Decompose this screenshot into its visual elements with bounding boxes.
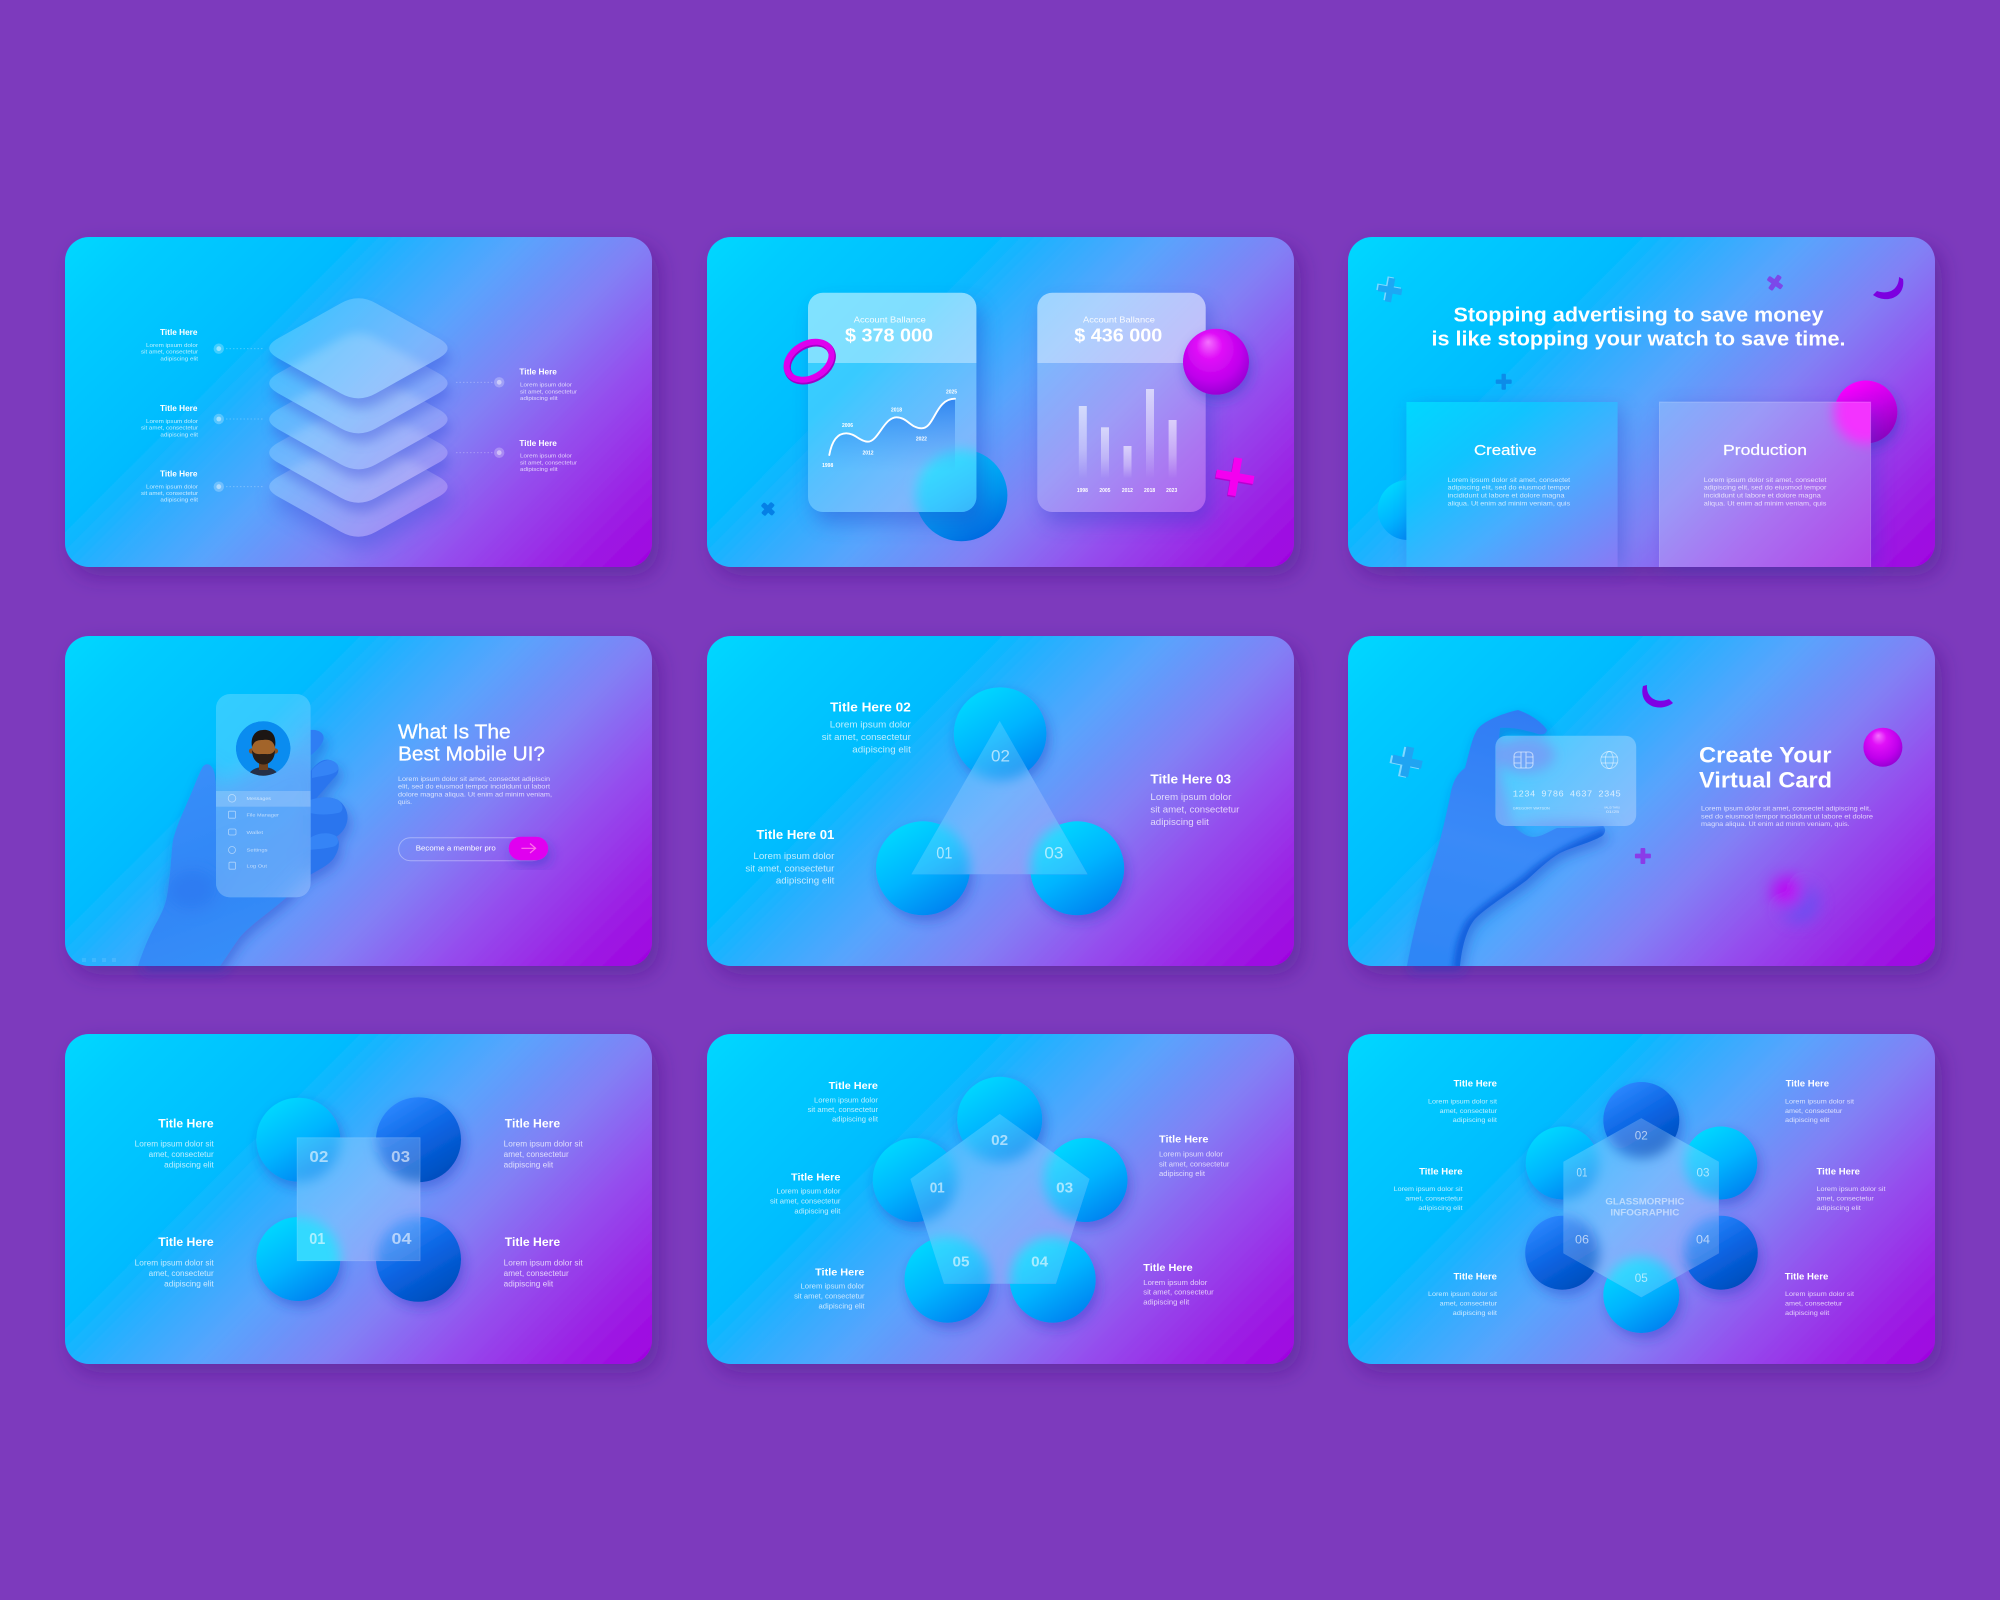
- text block: bottom left: Title Here: [1454, 1271, 1497, 1282]
- card header text: $ 436 000: [1074, 326, 1162, 346]
- spheres behind panels: [1378, 380, 1897, 540]
- left text block 1: [141, 327, 198, 362]
- bar chart: 2018: [1144, 488, 1155, 494]
- card globe: [1601, 752, 1618, 768]
- center label: [1605, 1196, 1685, 1218]
- heading: Stopping advertising to save money: [1454, 305, 1824, 327]
- text block: title 03: Title Here 03: [1150, 771, 1231, 786]
- text block: bottom left: [1428, 1271, 1498, 1317]
- numbers: 02: [1635, 1128, 1648, 1142]
- text block: bottom right: Lorem ipsum dolor: [1143, 1280, 1208, 1287]
- card header text: $ 378 000: [845, 326, 933, 346]
- left text block 3: [141, 468, 198, 504]
- text block: middle left: adipiscing elit: [794, 1208, 840, 1215]
- numbers: [309, 1149, 412, 1248]
- text block: top left: amet, consectetur: [149, 1150, 214, 1159]
- body text: Lorem ipsum dolor sit amet, consectet adipiscin: [398, 776, 551, 783]
- card number and details: 01/25: [1606, 810, 1619, 814]
- right text block 1: adipiscing elit: [520, 396, 558, 402]
- slide card background: [65, 636, 652, 966]
- panel: production: [1659, 402, 1872, 567]
- text block: title 03: sit amet, consectetur: [1150, 805, 1239, 815]
- text block: top left: adipiscing elit: [1453, 1117, 1497, 1124]
- body text: dolore magna aliqua. Ut enim ad minim veniam,: [398, 791, 552, 798]
- icon: cyan plus: [1387, 743, 1425, 780]
- text block: top right: sit amet, consectetur: [1159, 1161, 1230, 1168]
- illustration: blue hand: [1407, 710, 1606, 970]
- menu list: Messages: [246, 796, 272, 801]
- glass hexagon: [1563, 1118, 1719, 1298]
- text block: top left: Title Here: [1454, 1079, 1497, 1090]
- slide card background: [1348, 237, 1935, 567]
- right text block 2: adipiscing elit: [520, 467, 558, 473]
- line chart: 2025: [946, 389, 957, 395]
- card number and details: GREGORY WATSON: [1513, 806, 1550, 810]
- text block: bottom right: adipiscing elit: [1785, 1310, 1829, 1317]
- text block: top left: Title Here: [158, 1118, 214, 1130]
- text block: title 01: sit amet, consectetur: [745, 863, 834, 873]
- left text block 3: sit amet, consectetur: [141, 491, 198, 497]
- creative body text: [1448, 477, 1570, 507]
- bar chart: [1077, 389, 1177, 494]
- text block: middle left: [1394, 1167, 1463, 1212]
- production body text: [1704, 477, 1827, 507]
- bar chart: 2005: [1099, 488, 1111, 494]
- illustration: blue hand: [138, 730, 348, 966]
- numbers: [936, 746, 1063, 863]
- text block: bottom left: [135, 1237, 214, 1289]
- text block: top left: Lorem ipsum dolor sit: [135, 1139, 214, 1148]
- text block: middle left: sit amet, consectetur: [770, 1199, 841, 1206]
- card number and details: 1234 9786 4637 2345: [1513, 790, 1621, 800]
- spheres: [873, 1077, 1128, 1323]
- left text block 1: Title Here: [160, 327, 198, 337]
- body text: elit, sed do eiusmod tempor incididunt ut labort: [398, 784, 550, 791]
- text block: bottom right: [504, 1237, 583, 1289]
- text block: title 02: Lorem ipsum dolor: [830, 720, 911, 730]
- numbers: 06: [1575, 1233, 1589, 1247]
- text block: top right: Lorem ipsum dolor sit: [1785, 1098, 1854, 1105]
- menu list: Settings: [246, 848, 268, 853]
- spheres: [256, 1097, 461, 1302]
- icon: magenta plus: [1212, 455, 1257, 500]
- text block: top left: Title Here: [829, 1080, 878, 1092]
- left text block 1: Lorem ipsum dolor: [146, 343, 198, 349]
- text block: top right: Lorem ipsum dolor: [1159, 1152, 1224, 1159]
- text block: bottom left: sit amet, consectetur: [794, 1294, 865, 1301]
- bar chart: 1998: [1077, 488, 1088, 494]
- numbers: [1575, 1128, 1710, 1285]
- numbers: 05: [1635, 1271, 1648, 1285]
- line chart: 2018: [891, 407, 902, 413]
- slide card background: [707, 1034, 1294, 1364]
- text block: top right: adipiscing elit: [1785, 1117, 1829, 1124]
- text block: middle left: amet, consectetur: [1405, 1196, 1463, 1203]
- text block: middle right: Lorem ipsum dolor sit: [1816, 1186, 1886, 1193]
- heading: [1699, 743, 1832, 793]
- menu list: [228, 794, 279, 869]
- icon: magenta ring: [780, 334, 839, 389]
- text block: middle left: [770, 1171, 841, 1215]
- card header text: Account Ballance: [854, 315, 926, 325]
- icon: small blue plus: [1496, 374, 1512, 390]
- text block: bottom right: Title Here: [1143, 1262, 1193, 1274]
- menu list: Wallet: [246, 830, 264, 835]
- text block: top left: adipiscing elit: [832, 1117, 878, 1124]
- card shadows: [814, 304, 1211, 523]
- text block: title 01: [745, 827, 835, 886]
- glass phone: [216, 694, 311, 898]
- text block: middle right: amet, consectetur: [1816, 1196, 1875, 1203]
- line chart: 1998: [822, 463, 833, 469]
- text block: middle right: Title Here: [1816, 1167, 1860, 1178]
- icon: blue x: [757, 498, 779, 520]
- text block: middle left: Lorem ipsum dolor sit: [1394, 1186, 1463, 1193]
- bar chart: 2023: [1166, 488, 1177, 494]
- text block: bottom left: Title Here: [158, 1237, 214, 1249]
- menu list: File Manager: [246, 812, 279, 817]
- panel shadows: [1412, 408, 1876, 567]
- heading: Virtual Card: [1699, 768, 1832, 793]
- text block: bottom left: Lorem ipsum dolor: [800, 1284, 865, 1291]
- left text block 2: Lorem ipsum dolor: [146, 419, 198, 425]
- text block: top left: Lorem ipsum dolor sit: [1428, 1098, 1497, 1105]
- center label: GLASSMORPHIC: [1605, 1196, 1685, 1206]
- panel: virtual card slide: [1348, 636, 1935, 970]
- text block: middle left: Title Here: [791, 1171, 841, 1183]
- body text: Lorem ipsum dolor sit amet, consectet adipiscing elit,: [1701, 806, 1871, 813]
- body text: sed do eiusmod tempor incididunt ut labore et dolore: [1701, 813, 1874, 820]
- text block: bottom right: [1143, 1262, 1214, 1306]
- numbers: 02: [991, 1132, 1008, 1149]
- text block: top left: [135, 1118, 214, 1169]
- slide card background: [65, 237, 652, 567]
- avatar: [236, 721, 290, 776]
- text block: title 02: [822, 700, 911, 754]
- text block: bottom left: Lorem ipsum dolor sit: [135, 1258, 214, 1267]
- numbers: 01: [1576, 1165, 1588, 1179]
- connector dots and dotted leader lines: [214, 344, 504, 492]
- icon: purple x: [1763, 271, 1787, 295]
- numbers: 01: [309, 1231, 325, 1248]
- menu list: Log Out: [246, 863, 268, 868]
- text block: top left: sit amet, consectetur: [808, 1107, 879, 1114]
- numbers: [930, 1132, 1073, 1270]
- panel: production: Production: [1723, 442, 1807, 459]
- text block: top left: [1428, 1079, 1498, 1124]
- creative body text: aliqua. Ut enim ad minim veniam, quis: [1448, 500, 1570, 507]
- numbers: 04: [392, 1231, 412, 1248]
- numbers: 02: [991, 746, 1010, 765]
- line chart: 2012: [862, 450, 874, 456]
- text block: middle left: adipiscing elit: [1418, 1205, 1463, 1212]
- glass credit card: [1495, 736, 1636, 826]
- icon: small purple plus: [1635, 848, 1651, 864]
- left text block 2: [141, 403, 198, 438]
- text block: top left: Lorem ipsum dolor: [814, 1097, 879, 1104]
- heading: Best Mobile UI?: [398, 744, 545, 766]
- spheres: [1525, 1082, 1758, 1333]
- text block: top right: [504, 1118, 583, 1169]
- text block: bottom right: amet, consectetur: [1785, 1301, 1843, 1308]
- panel: creative: Creative: [1474, 442, 1537, 459]
- heading: [1432, 305, 1846, 351]
- production body text: adipiscing elit, sed do eiusmod tempor: [1704, 485, 1826, 492]
- text block: top right: [1785, 1079, 1854, 1124]
- left text block 2: sit amet, consectetur: [141, 426, 198, 432]
- numbers: 04: [1696, 1233, 1710, 1247]
- small faint footer icons: [82, 958, 116, 962]
- text block: title 03: Lorem ipsum dolor: [1150, 792, 1231, 802]
- pink sphere: [1863, 728, 1902, 767]
- text block: bottom right: Lorem ipsum dolor sit: [1785, 1291, 1854, 1298]
- numbers: 01: [936, 844, 952, 863]
- spheres: [876, 687, 1124, 915]
- glass card: line chart balance: [808, 292, 976, 512]
- text block: top left: [808, 1080, 879, 1124]
- numbers: 03: [1044, 844, 1063, 863]
- heading: What Is The: [398, 722, 511, 744]
- numbers: 02: [309, 1149, 329, 1166]
- panel: creative: [1406, 402, 1618, 567]
- text block: bottom right: Title Here: [505, 1237, 560, 1249]
- text block: title 01: Title Here 01: [756, 827, 834, 842]
- text block: bottom right: Lorem ipsum dolor sit: [504, 1258, 583, 1267]
- heading: Create Your: [1699, 743, 1832, 768]
- production body text: Lorem ipsum dolor sit amet, consectet: [1704, 477, 1827, 484]
- text block: bottom left: Title Here: [815, 1267, 865, 1279]
- right text block 2: sit amet, consectetur: [520, 460, 577, 466]
- production body text: incididunt ut labore et dolore magna: [1704, 492, 1821, 499]
- text block: bottom right: adipiscing elit: [1143, 1299, 1189, 1306]
- card header text: [845, 315, 933, 346]
- panel: advertising quote slide: [1348, 237, 1935, 567]
- slide card background: [707, 237, 1294, 567]
- text block: bottom left: adipiscing elit: [1453, 1310, 1497, 1317]
- left text block 1: sit amet, consectetur: [141, 350, 198, 356]
- text block: title 03: [1150, 771, 1239, 827]
- card header text: Account Ballance: [1083, 315, 1155, 325]
- text block: top right: Lorem ipsum dolor sit: [504, 1139, 583, 1148]
- line chart: 2022: [916, 436, 927, 442]
- pink sphere: [1183, 329, 1249, 395]
- left text block 3: Lorem ipsum dolor: [146, 484, 198, 490]
- text block: top right: adipiscing elit: [1159, 1171, 1205, 1178]
- heading: is like stopping your watch to save time.: [1432, 329, 1846, 351]
- text block: bottom left: amet, consectetur: [1440, 1301, 1498, 1308]
- numbers: 04: [1031, 1253, 1049, 1270]
- right text block 2: Title Here: [519, 438, 557, 448]
- text block: top right: adipiscing elit: [504, 1160, 554, 1169]
- right text block 1: Title Here: [519, 367, 557, 377]
- glass pentagon: [910, 1114, 1090, 1284]
- panel: mobile UI slide: [65, 636, 652, 966]
- panel: four-circle square slide: [65, 1034, 652, 1364]
- text block: bottom left: adipiscing elit: [164, 1280, 214, 1289]
- text block: top right: Title Here: [505, 1118, 560, 1130]
- stacked glass diamonds: [268, 298, 454, 553]
- text block: bottom right: sit amet, consectetur: [1143, 1290, 1214, 1297]
- text block: middle left: Lorem ipsum dolor: [776, 1189, 841, 1196]
- left text block 2: Title Here: [160, 403, 198, 413]
- text block: bottom left: [794, 1267, 865, 1310]
- text block: top right: amet, consectetur: [1785, 1108, 1843, 1115]
- text block: top left: amet, consectetur: [1440, 1108, 1498, 1115]
- text block: top left: adipiscing elit: [164, 1160, 214, 1169]
- icon: purple arc: [1642, 685, 1673, 708]
- slide card background: [65, 1034, 652, 1364]
- icon: purple arc: [1873, 277, 1903, 299]
- text block: middle left: Title Here: [1419, 1167, 1463, 1178]
- card chip: [1514, 752, 1533, 768]
- right text block 1: Lorem ipsum dolor: [520, 383, 572, 389]
- body text: [398, 776, 552, 806]
- text block: bottom right: amet, consectetur: [504, 1269, 569, 1278]
- text block: top right: amet, consectetur: [504, 1150, 569, 1159]
- text block: title 02: sit amet, consectetur: [822, 732, 911, 742]
- button: become a member: [399, 837, 548, 861]
- slide card background: [1348, 636, 1935, 966]
- text block: title 01: adipiscing elit: [776, 876, 835, 886]
- left text block 3: adipiscing elit: [160, 498, 198, 504]
- bar chart: 2012: [1122, 488, 1133, 494]
- text block: bottom left: adipiscing elit: [818, 1303, 865, 1310]
- text block: middle right: [1816, 1167, 1886, 1212]
- line chart: 2006: [842, 423, 853, 429]
- glass triangle: [912, 721, 1088, 874]
- panel: pentagon diagram slide: [707, 1034, 1294, 1364]
- heading: [398, 722, 545, 766]
- creative body text: adipiscing elit, sed do eiusmod tempor: [1448, 485, 1570, 492]
- text block: title 02: Title Here 02: [830, 700, 911, 715]
- text block: title 03: adipiscing elit: [1150, 817, 1209, 827]
- card number and details: VALID THRU: [1604, 806, 1620, 810]
- text block: top right: [1159, 1133, 1230, 1178]
- slide card background: [1348, 1034, 1935, 1364]
- creative body text: incididunt ut labore et dolore magna: [1448, 492, 1565, 499]
- panel: layered stack slide: [65, 237, 652, 567]
- numbers: 03: [1056, 1179, 1073, 1196]
- text block: title 01: Lorem ipsum dolor: [753, 851, 834, 861]
- production body text: aliqua. Ut enim ad minim veniam, quis: [1704, 500, 1826, 507]
- numbers: 03: [1696, 1165, 1710, 1179]
- glass square: [296, 1137, 420, 1262]
- text block: top right: Title Here: [1786, 1079, 1829, 1090]
- left text block 3: Title Here: [160, 468, 198, 478]
- right text block 2: [519, 438, 577, 473]
- line chart: [822, 389, 957, 472]
- body text: [1701, 806, 1874, 828]
- numbers: 03: [391, 1149, 410, 1166]
- icon: cyan plus: [1375, 275, 1404, 304]
- text block: bottom right: [1785, 1271, 1854, 1317]
- text block: bottom left: amet, consectetur: [149, 1269, 214, 1278]
- text block: bottom right: adipiscing elit: [504, 1280, 554, 1289]
- button: become a member: Become a member pro: [416, 844, 496, 853]
- text block: middle right: adipiscing elit: [1816, 1205, 1861, 1212]
- card header text: [1074, 315, 1162, 346]
- right text block 2: Lorem ipsum dolor: [520, 454, 572, 460]
- left text block 2: adipiscing elit: [160, 432, 198, 438]
- panel: hexagon diagram slide: [1348, 1034, 1935, 1364]
- blue sphere behind card: [915, 449, 1007, 541]
- numbers: 01: [930, 1179, 945, 1196]
- right text block 1: sit amet, consectetur: [520, 389, 577, 395]
- panel: account balance slide: [707, 237, 1294, 567]
- card number and details: [1513, 790, 1621, 814]
- numbers: 05: [952, 1253, 970, 1270]
- text block: top right: Title Here: [1159, 1133, 1209, 1145]
- slide card background: [707, 636, 1294, 966]
- creative body text: Lorem ipsum dolor sit amet, consectet: [1448, 477, 1570, 484]
- right text block 1: [519, 367, 577, 402]
- center label: INFOGRAPHIC: [1610, 1208, 1680, 1218]
- text block: bottom right: Title Here: [1785, 1271, 1828, 1282]
- left text block 1: adipiscing elit: [160, 356, 198, 362]
- text block: bottom left: Lorem ipsum dolor sit: [1428, 1291, 1497, 1298]
- body text: magna aliqua. Ut enim ad minim veniam, quis.: [1701, 821, 1850, 828]
- glass card: bar chart balance: [1037, 292, 1207, 513]
- text block: title 02: adipiscing elit: [852, 744, 911, 754]
- body text: quis.: [398, 799, 412, 806]
- blurred glow blob: [1772, 877, 1819, 923]
- panel: triangle diagram slide: [707, 636, 1294, 966]
